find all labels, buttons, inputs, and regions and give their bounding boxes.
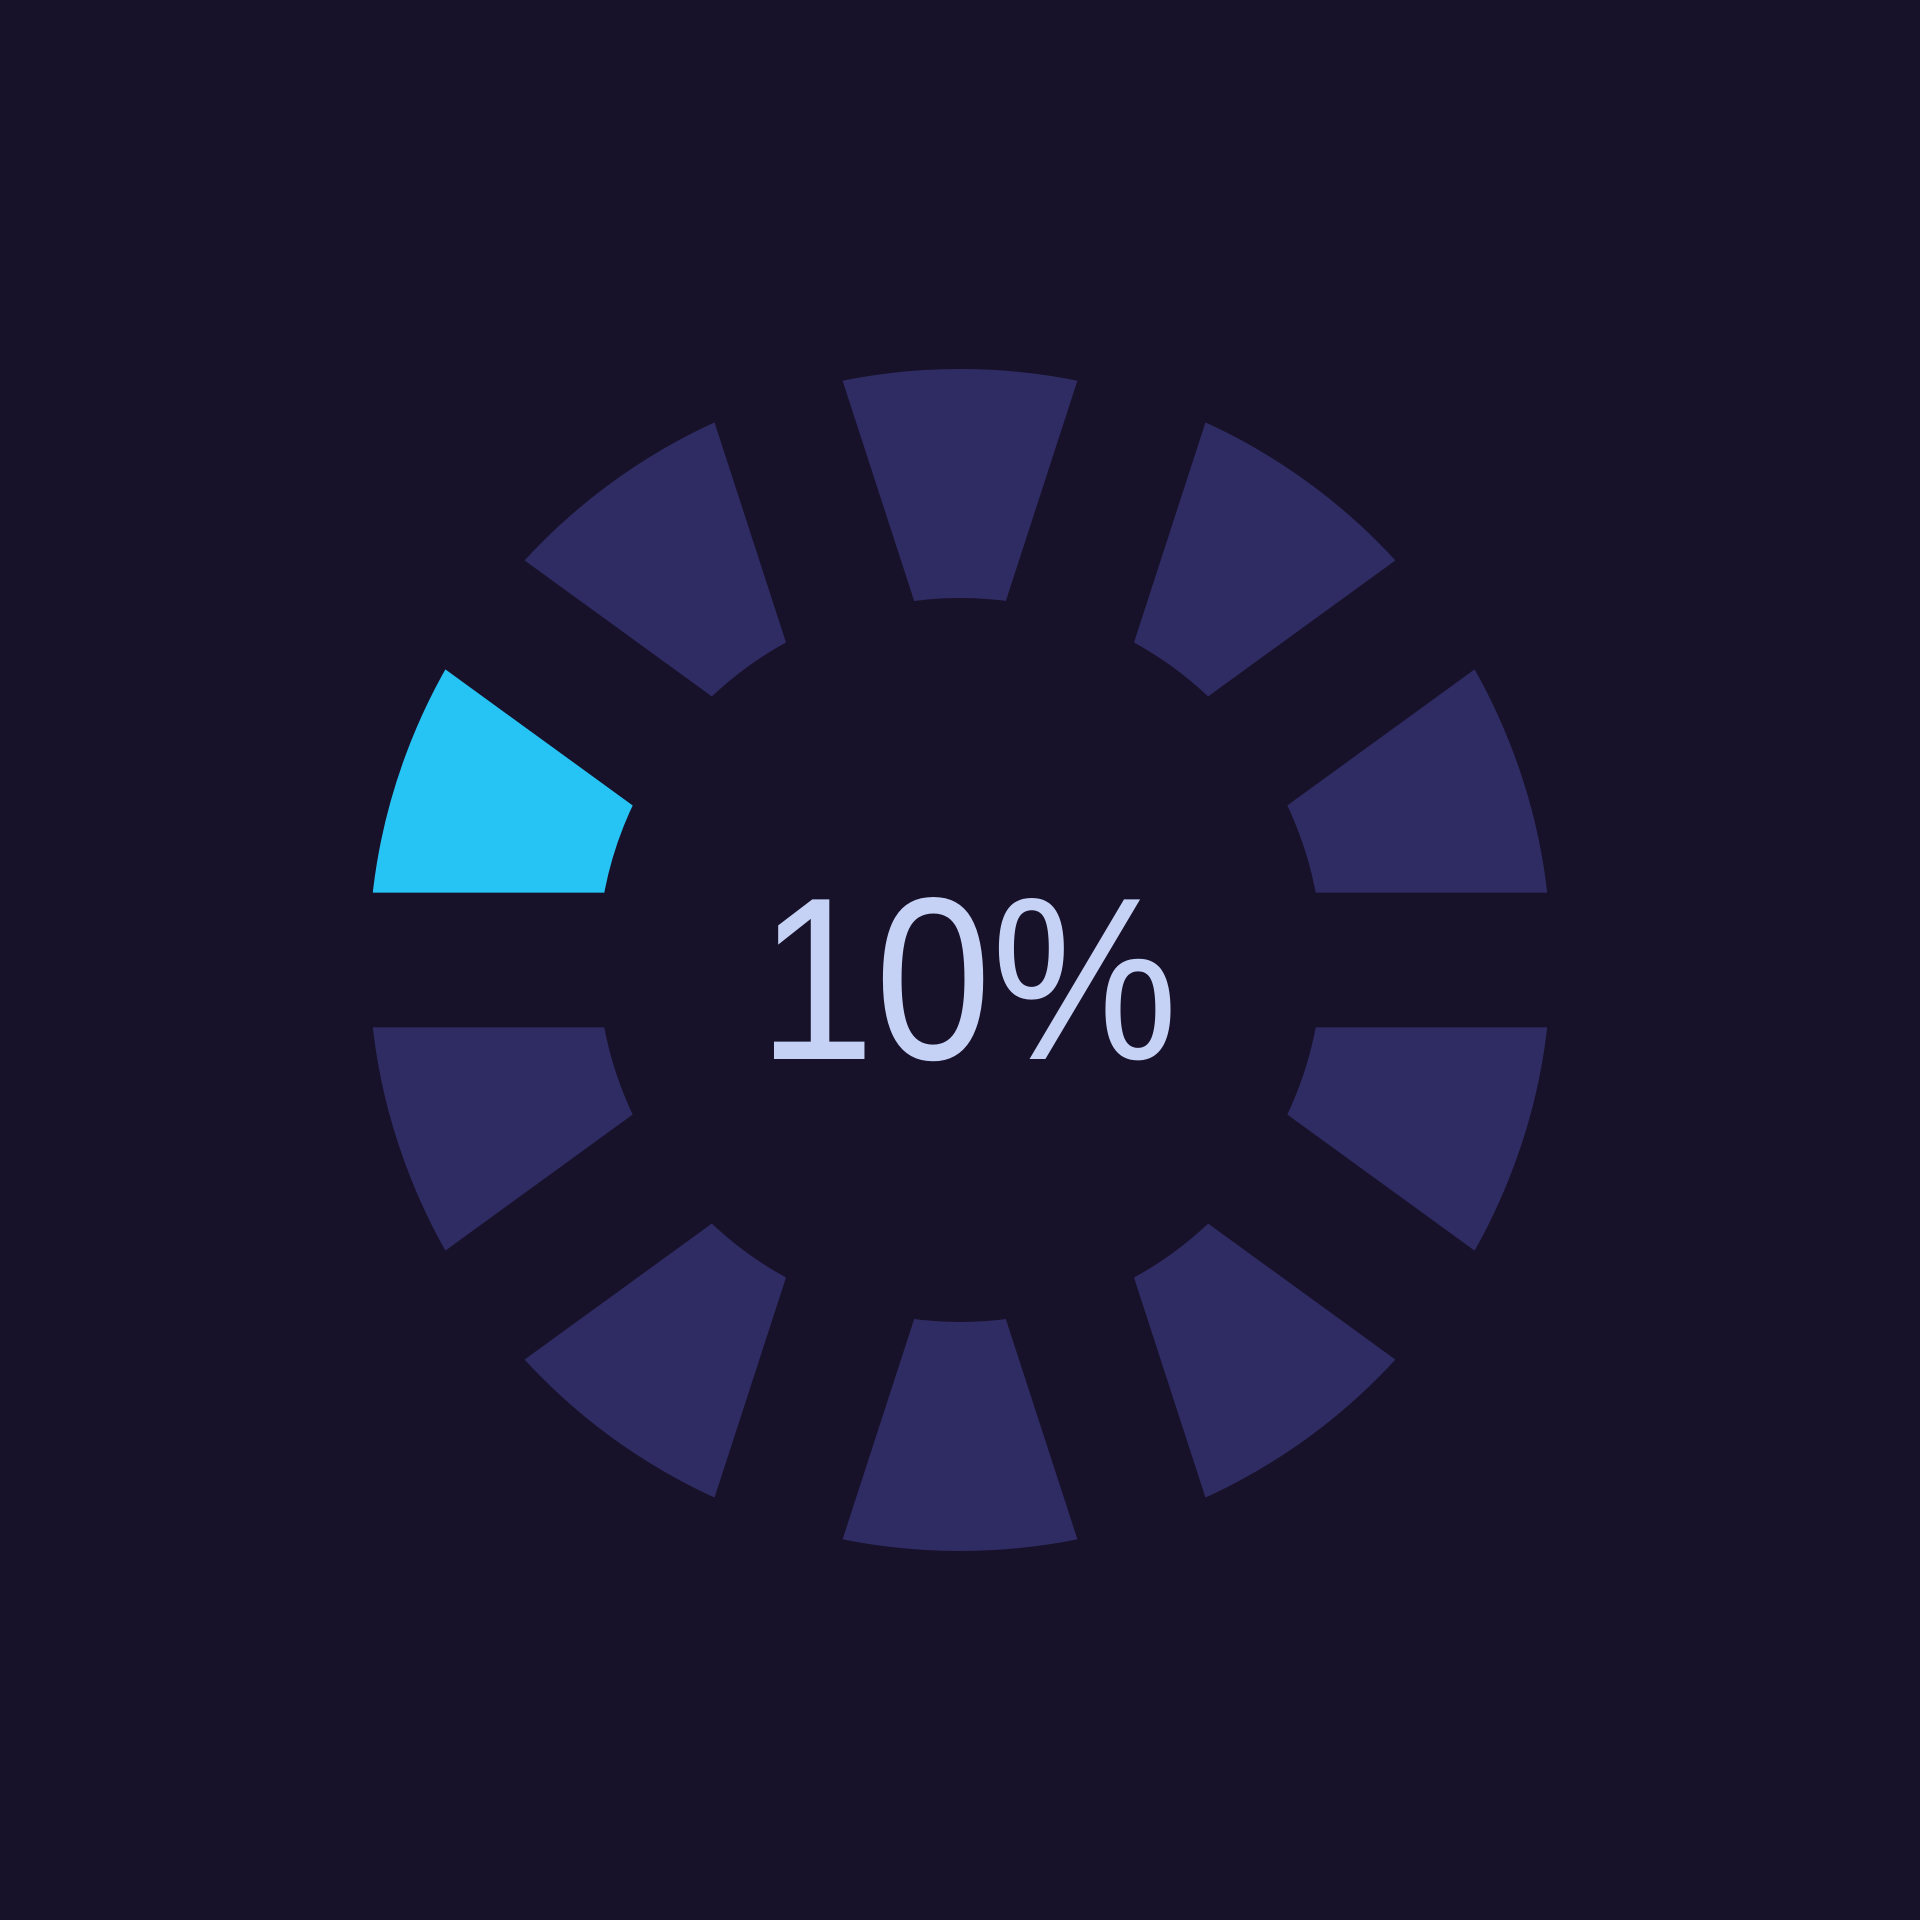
percentage label: 10% [758,850,1178,1109]
highlighted segment [372,670,633,893]
chart: segmented progress ring [372,369,1548,1551]
ring segments [484,484,1436,1436]
